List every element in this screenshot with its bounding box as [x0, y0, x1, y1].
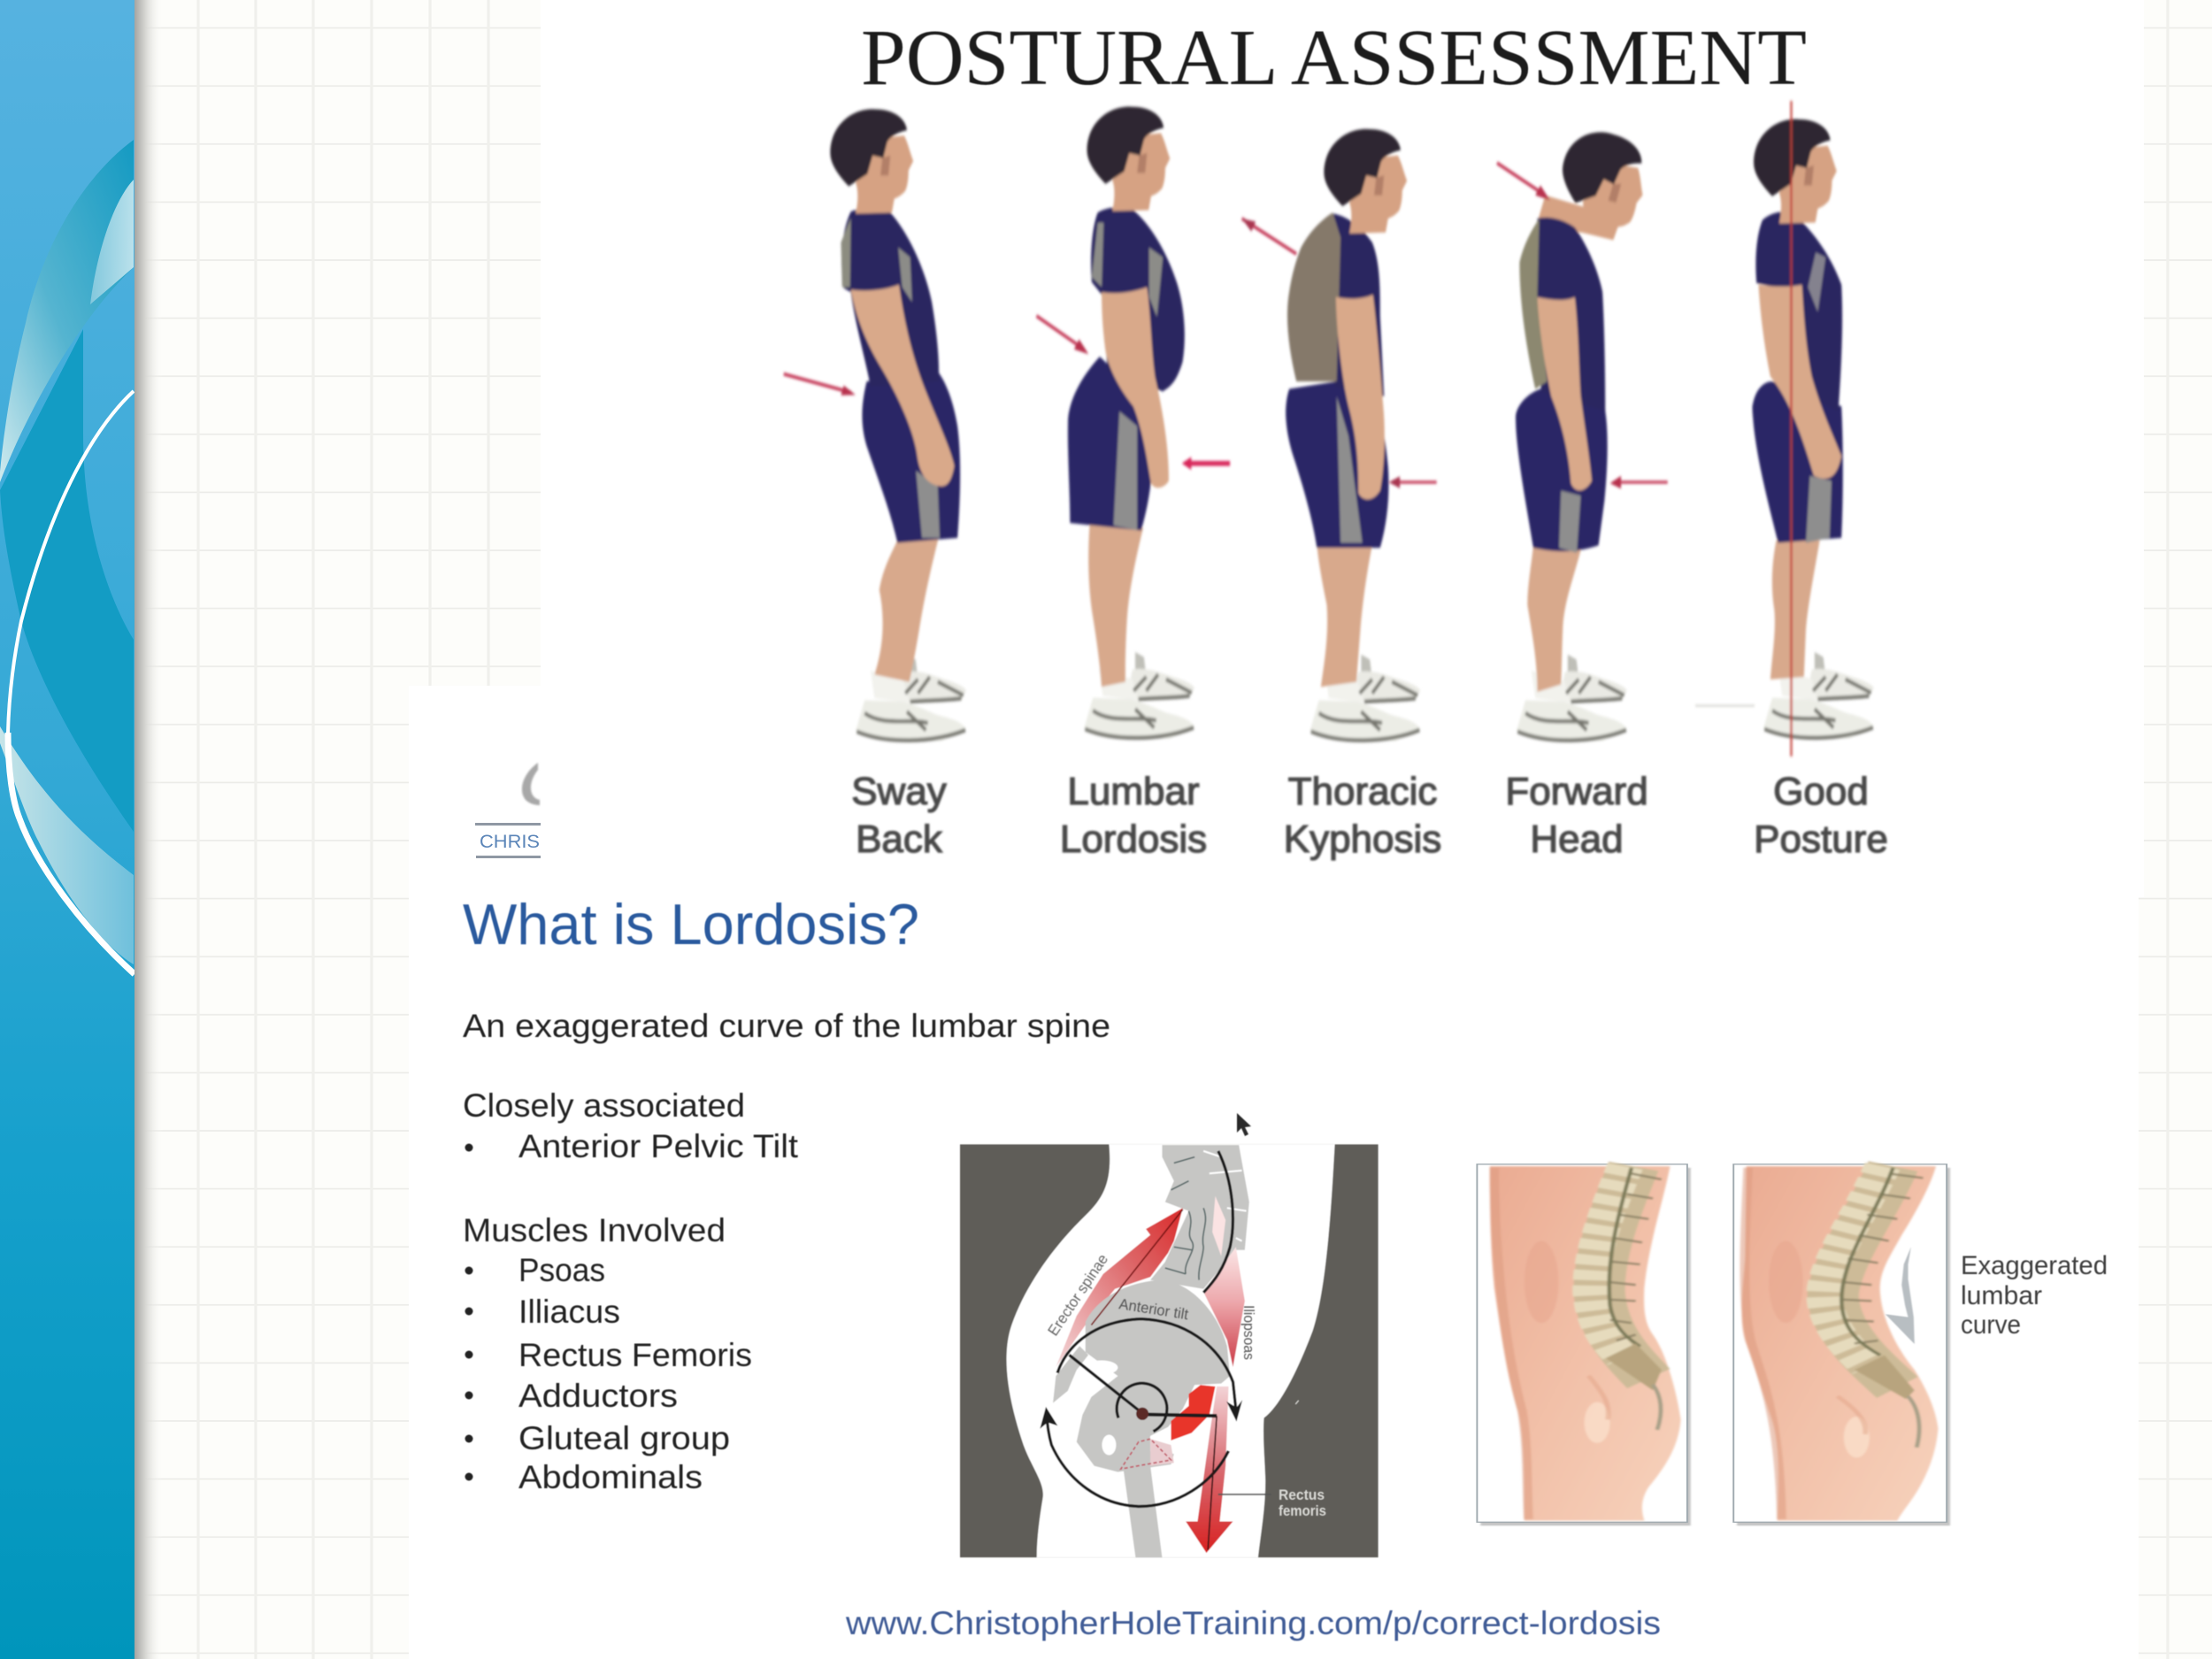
text: definition: An exaggerated curve of the lumbar spine	[463, 1008, 1110, 1044]
title: POSTURAL ASSESSMENT	[861, 14, 1807, 102]
diagram labels: femoris	[1279, 1502, 1326, 1519]
posture labels: Thoracic	[1288, 770, 1437, 813]
text: muscles involved list: Gluteal group	[518, 1420, 730, 1456]
diagram labels: Erector spinae	[1045, 1251, 1111, 1339]
figures: five posture photos	[784, 101, 1874, 757]
diagram labels: Rectus	[1279, 1486, 1325, 1503]
figure: lumbar lordosis	[1036, 107, 1230, 739]
figure: sway back	[784, 109, 966, 741]
text: closely associated list	[463, 1087, 799, 1164]
chart: spine comparison illustrations	[1477, 1164, 1950, 1525]
heading: what is lordosis: What is Lordosis?	[463, 892, 919, 956]
figure: forward head	[1497, 123, 1668, 741]
logo fragment	[475, 763, 541, 858]
logo fragment: CHRIS	[480, 832, 540, 852]
text: muscles involved list: Muscles Involved	[463, 1212, 726, 1248]
posture labels: Posture	[1754, 818, 1888, 861]
panel: white slide background	[409, 0, 2144, 1659]
posture labels: Sway	[851, 770, 947, 813]
text: closely associated list: Anterior Pelvic Tilt	[518, 1128, 799, 1164]
text: closely associated list: Closely associated	[463, 1087, 745, 1124]
lordosis spine panel	[1733, 1164, 1950, 1525]
text: muscles involved list	[463, 1212, 752, 1495]
icon: grey curve arrow	[1886, 1247, 1915, 1344]
text: exaggerated lumbar curve label: Exaggerated	[1961, 1251, 2108, 1280]
icon: mouse cursor	[1237, 1113, 1251, 1136]
posture labels: Lumbar	[1067, 770, 1200, 813]
chart: pelvic tilt diagram	[960, 1144, 1379, 1557]
figure: good posture	[1695, 101, 1874, 757]
diagram labels: Iliopsoas	[1240, 1305, 1257, 1360]
posture labels: Lordosis	[1060, 818, 1207, 861]
figure: thoracic kyphosis	[1242, 129, 1437, 741]
posture labels: Head	[1530, 818, 1624, 861]
text: exaggerated lumbar curve label: curve	[1961, 1310, 2021, 1340]
posture labels	[851, 770, 1888, 861]
posture labels: Back	[856, 818, 943, 861]
text: muscles involved list: Adductors	[518, 1378, 678, 1414]
text: muscles involved list: Rectus Femoris	[518, 1337, 752, 1373]
diagram labels: Anterior tilt	[1118, 1295, 1190, 1323]
text: muscles involved list: Illiacus	[518, 1294, 620, 1330]
text: muscles involved list: Psoas	[518, 1252, 605, 1288]
posture labels: Forward	[1505, 770, 1648, 813]
posture labels: Kyphosis	[1284, 818, 1441, 861]
normal spine panel	[1477, 1164, 1691, 1525]
text: website url: www.ChristopherHoleTraining.com/p/correct-lordosis	[845, 1605, 1661, 1641]
posture labels: Good	[1773, 770, 1869, 813]
diagram labels	[1045, 1251, 1326, 1519]
text: exaggerated lumbar curve label	[1961, 1251, 2108, 1340]
panel: left blue sidebar	[0, 0, 163, 1659]
text: muscles involved list: Abdominals	[518, 1459, 703, 1495]
text: exaggerated lumbar curve label: lumbar	[1961, 1281, 2042, 1310]
